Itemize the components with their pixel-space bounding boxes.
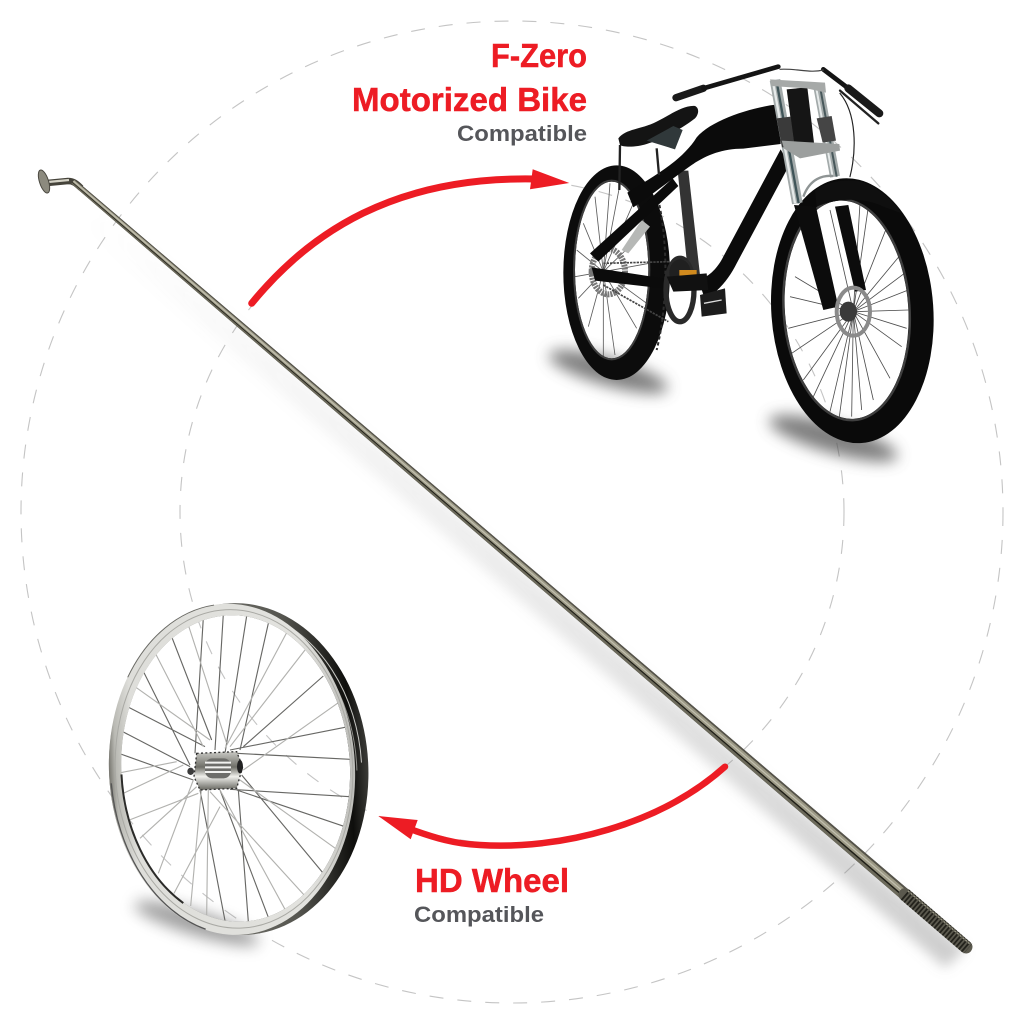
spoke shaft [71, 179, 909, 899]
front tire top over fork [815, 180, 902, 213]
spoke shadow [85, 215, 965, 968]
wheel hub [187, 752, 243, 790]
saddle and supports [618, 106, 698, 190]
bike chain [603, 262, 670, 322]
crankset and pedals [666, 258, 727, 322]
rear wheel spokes [575, 183, 649, 357]
arrow to wheel [378, 767, 725, 846]
spoke product [36, 169, 970, 968]
rear tire [563, 165, 670, 380]
rear tire tread [657, 193, 665, 350]
label: F-Zero Motorized Bike: Motorized Bike [352, 81, 587, 118]
label: F-Zero Motorized Bike [352, 37, 587, 118]
lower fork legs [794, 205, 866, 310]
front wheel spokes [788, 203, 908, 417]
spoke head [36, 169, 81, 194]
front brake disc [837, 288, 870, 336]
spoke thread [905, 891, 970, 949]
rear cassette and disc [589, 249, 625, 294]
label: F-Zero Motorized Bike: F-Zero [491, 37, 587, 74]
arrow to bike [252, 169, 569, 303]
headlight box and fork collars [770, 79, 840, 158]
bicycle photo illustration [545, 67, 942, 471]
wheel rim [100, 596, 377, 942]
label: wheel Compatible: Compatible [414, 902, 544, 927]
bike ground shadows [545, 341, 902, 471]
seat tube [678, 171, 700, 277]
wheel spokes [121, 614, 350, 922]
label: bike Compatible: Compatible [457, 121, 587, 146]
wheel photo illustration [100, 596, 377, 954]
label: HD Wheel: HD Wheel [415, 862, 569, 899]
wheel ground shadow [131, 893, 262, 954]
bike frame [590, 104, 789, 299]
front fork chrome tubes [773, 80, 837, 203]
front brake arch [803, 176, 833, 197]
front tire [762, 173, 942, 449]
silver rear strut [622, 220, 650, 253]
handlebars [676, 67, 879, 177]
